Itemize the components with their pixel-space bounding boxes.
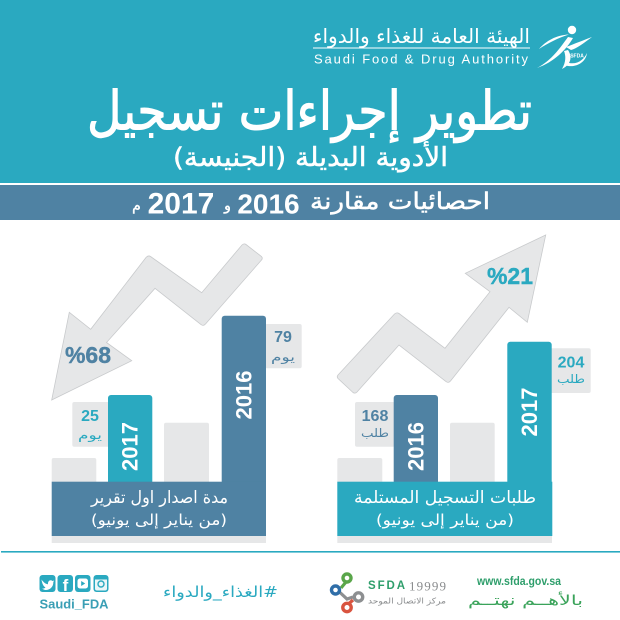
- trend arrow down: [52, 244, 262, 400]
- panel caption: طلبات التسجيل المستلمة: [354, 488, 536, 508]
- percentage 21: %21: [487, 263, 533, 289]
- organisation name: Saudi Food & Drug Authority: [314, 52, 528, 66]
- icon: SFDA logo: [537, 26, 592, 69]
- value 25: [72, 402, 110, 447]
- header background: [0, 0, 620, 183]
- value 204: [550, 348, 591, 393]
- comparison band: و: [223, 198, 231, 214]
- panel caption: [52, 482, 266, 543]
- value 168: طلب: [361, 426, 389, 440]
- panel caption: [337, 482, 552, 543]
- comparison band: م: [132, 198, 141, 214]
- bar 2017: 2017: [118, 422, 142, 471]
- handle: Saudi_FDA: [40, 596, 109, 612]
- social media block: [40, 575, 109, 612]
- comparison band: 2016: [237, 188, 300, 220]
- bar 2016: 2016: [404, 422, 428, 471]
- value 168: 168: [362, 408, 388, 425]
- icon: twitter: [40, 575, 56, 592]
- subtitle: الأدوية البديلة (الجنيسة): [173, 140, 448, 173]
- comparison band: احصائيات مقارنة: [310, 189, 490, 215]
- hotline number: SFDA: [368, 580, 405, 592]
- hashtag: #الغذاء_والدواء: [163, 583, 278, 602]
- decorative gray bars: [337, 423, 495, 482]
- bar 2017: [108, 395, 152, 482]
- panel caption: (من يناير إلى يونيو): [91, 511, 227, 529]
- comparison band: [0, 185, 620, 220]
- organisation name: الهيئة العامة للغذاء والدواء: [313, 24, 530, 48]
- title: تطوير إجراءات تسجيل: [87, 80, 532, 142]
- panel caption: مدة اصدار اول تقرير: [90, 488, 228, 508]
- value 168: [355, 402, 395, 447]
- value 79: يوم: [271, 350, 295, 365]
- website and slogan: [468, 576, 583, 609]
- value 204: 204: [558, 354, 584, 372]
- call centre: [332, 574, 446, 612]
- comparison band: 2017: [148, 188, 214, 220]
- trend arrow up: [337, 235, 546, 393]
- icon: facebook: f: [63, 576, 69, 595]
- bar 2016: [394, 395, 438, 482]
- decorative gray bars: [52, 423, 209, 482]
- value 204: طلب: [557, 372, 585, 386]
- panel caption: (من يناير إلى يونيو): [376, 511, 514, 529]
- value 25: 25: [81, 408, 99, 425]
- bar 2017: 2017: [517, 388, 542, 436]
- call centre: 19999: [409, 578, 446, 594]
- value 79: [265, 324, 302, 368]
- panel: received registration applications: [337, 235, 591, 543]
- website and slogan: www.sfda.gov.sa: [476, 576, 562, 588]
- organisation name: [313, 24, 530, 66]
- bar 2016: 2016: [232, 371, 256, 419]
- website and slogan: بالأهــم نهتــم: [468, 591, 583, 609]
- footer divider: [1, 551, 620, 553]
- value 25: يوم: [78, 428, 102, 443]
- icon: SFDA logo: SFDA: [570, 54, 584, 60]
- bar 2017: [507, 342, 552, 482]
- icon: instagram: [94, 575, 108, 592]
- panel: time to first report: [52, 244, 302, 543]
- percentage 68: %68: [65, 342, 111, 368]
- call centre: مركز الاتصال الموحد: [368, 596, 446, 606]
- value 79: 79: [274, 329, 292, 346]
- icon: connected nodes logo: [332, 574, 363, 612]
- bar 2016: [222, 316, 266, 482]
- icon: youtube: [75, 575, 90, 592]
